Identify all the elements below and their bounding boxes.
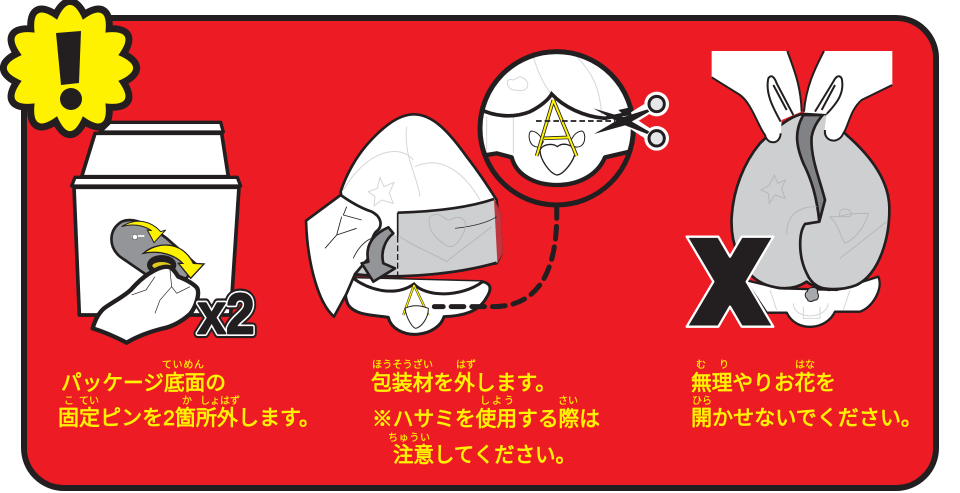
text block: step 3: ひら bbox=[692, 395, 712, 407]
egg bbox=[341, 114, 502, 277]
left hand bbox=[712, 51, 802, 143]
flower base bbox=[745, 277, 880, 327]
pin recess with arrows bbox=[111, 220, 204, 278]
yellow string bbox=[537, 100, 577, 156]
package box bbox=[72, 122, 241, 315]
text block: step 1: こ bbox=[64, 396, 74, 407]
wrapping film bbox=[353, 198, 503, 277]
text block: step 1: パッケージ底面の bbox=[61, 372, 226, 395]
text block: step 3: 無理やりお花を bbox=[691, 372, 836, 395]
text block: step 2: ※ハサミを使用する際は bbox=[372, 408, 600, 431]
text block: step 2 bbox=[371, 358, 600, 467]
illustration: do not force open bbox=[687, 51, 892, 327]
text block: step 1 bbox=[58, 359, 320, 430]
label: x2: x2 bbox=[197, 282, 255, 346]
label: x2: x2 bbox=[197, 282, 255, 346]
label: x2: x2 bbox=[197, 282, 255, 346]
text block: step 2: ちゅうい bbox=[388, 432, 430, 444]
text block: step 2: 包装材を外します。 bbox=[371, 372, 556, 395]
text block: step 1: てい bbox=[79, 396, 99, 407]
text block: step 2: はず bbox=[456, 359, 476, 371]
hand peeling bbox=[306, 195, 381, 317]
text block: step 1: しょはず bbox=[200, 395, 240, 407]
illustration: package with pins bbox=[72, 122, 255, 346]
text block: step 3: はな bbox=[795, 359, 815, 371]
right hand bbox=[804, 51, 892, 141]
illustration: removing the wrapping bbox=[306, 50, 669, 334]
icon: big X bbox=[687, 237, 773, 327]
text block: step 1: か bbox=[182, 395, 192, 407]
arrow bbox=[362, 227, 395, 282]
text block: step 1: 固定ピンを2箇所外します。 bbox=[58, 407, 320, 430]
text block: step 2: ほうそうざい bbox=[372, 358, 433, 371]
text block: step 3: 開かせないでください。 bbox=[691, 407, 922, 430]
hand bbox=[93, 267, 198, 343]
dashed connector bbox=[434, 206, 557, 307]
text block: step 2: 注意してください。 bbox=[393, 444, 576, 467]
base under egg bbox=[346, 278, 490, 334]
text block: step 3: り bbox=[719, 359, 729, 371]
icon: scissors bbox=[593, 92, 669, 151]
text block: step 2: さい bbox=[558, 395, 578, 407]
text block: step 1: ていめん bbox=[162, 359, 204, 371]
icon: exclamation starburst bbox=[7, 5, 133, 131]
text block: step 3 bbox=[691, 359, 922, 430]
gray egg bbox=[732, 114, 889, 290]
magnified detail circle bbox=[477, 50, 637, 205]
text block: step 3: む bbox=[696, 359, 706, 371]
text block: step 2: しよう bbox=[480, 395, 514, 407]
head and ears bbox=[529, 131, 585, 147]
